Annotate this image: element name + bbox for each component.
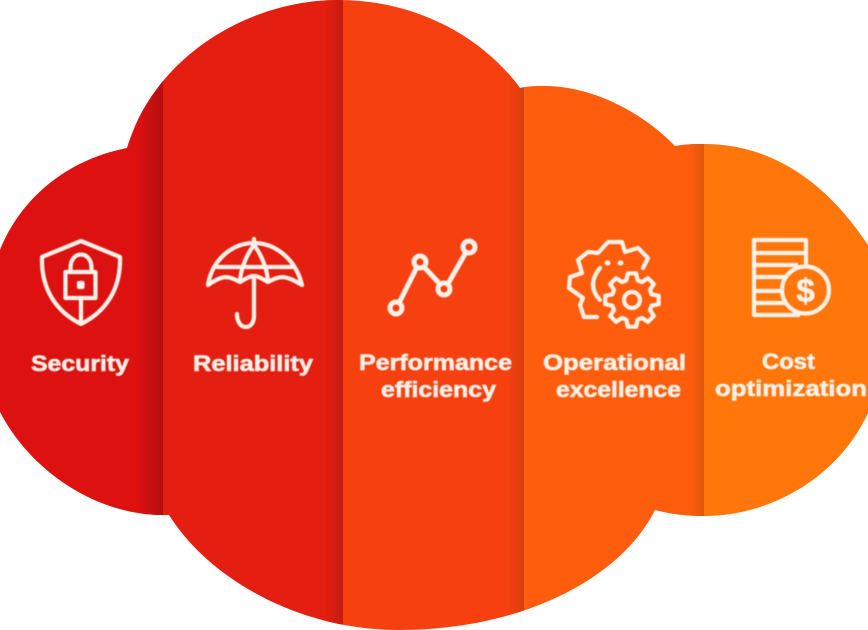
label: Cost optimization: Cost [762,349,816,374]
label: Operational excellence: Operational [543,350,686,375]
label: Operational excellence: excellence [556,377,681,402]
icon: coin stack with dollar coin [754,240,829,315]
performance efficiency column [359,241,512,402]
panel: security background [0,81,163,515]
label: Cost optimization: optimization [715,376,867,401]
panel: performance efficiency background [343,0,524,630]
label: Performance efficiency [359,350,512,402]
icon: line chart [390,241,475,314]
label: Performance efficiency: Performance [359,350,512,375]
security column [31,241,130,376]
cost optimization column [715,240,867,401]
reliability column [193,239,314,376]
icon: umbrella [208,239,302,327]
label: Security: Security [31,351,130,376]
icon: coin stack with dollar coin: $ [796,272,815,309]
label: Performance efficiency: efficiency [381,377,497,402]
panel: cost optimization background [704,144,868,516]
operational excellence column [543,242,686,402]
panel: reliability background [163,0,343,630]
label: Reliability: Reliability [193,351,314,376]
icon: gears [569,242,659,327]
panel: operational excellence background [524,86,704,610]
label: Cost optimization [715,349,867,401]
icon: shield with padlock [42,241,120,324]
label: Operational excellence [543,350,686,402]
